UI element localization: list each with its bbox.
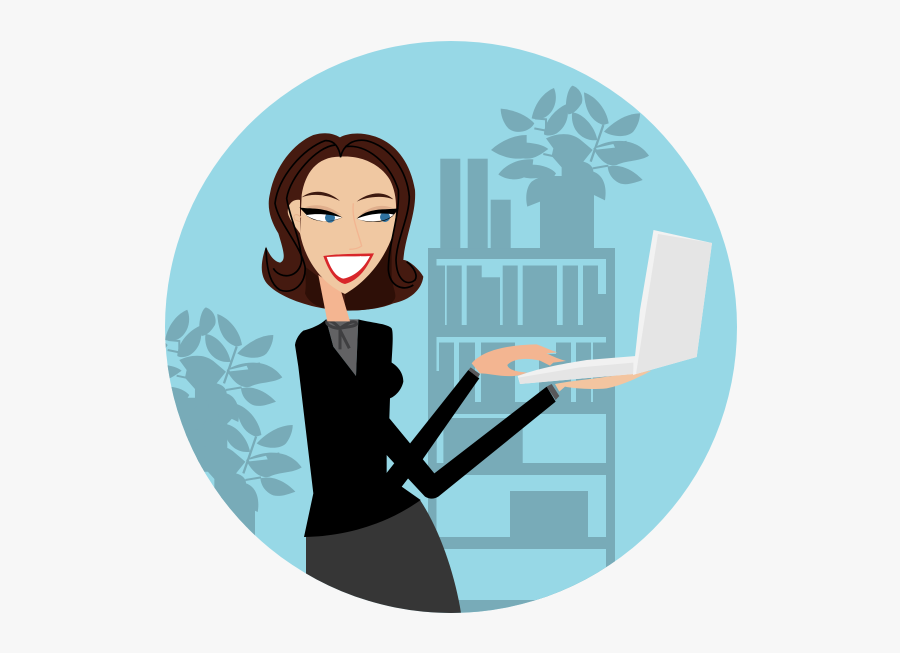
plant in vase, top right: [491, 86, 649, 250]
lower hand: [555, 371, 652, 392]
bookshelf: [428, 248, 615, 613]
jacket: [295, 319, 423, 537]
upper hand: [472, 344, 566, 376]
blouse: [326, 319, 358, 376]
cuffs: [468, 367, 559, 400]
torso and arms: [295, 319, 652, 537]
nose: [349, 203, 362, 249]
woman: [262, 133, 712, 620]
background circle: [165, 41, 737, 613]
hair strands: [266, 140, 416, 291]
hair shadow: [305, 237, 395, 311]
scene: office silhouettes: [124, 86, 649, 613]
books on top of shelf: [440, 159, 511, 249]
hair: [262, 133, 423, 310]
head: [262, 133, 423, 321]
laptop base: [518, 356, 637, 384]
front arm: [389, 387, 556, 499]
neck: [318, 275, 350, 321]
bow tie: [327, 321, 357, 349]
illustration: businesswoman with laptop: [165, 41, 737, 613]
laptop screen: [633, 230, 712, 375]
left eye: [299, 207, 343, 223]
ear: [288, 200, 300, 233]
eyelid shadow: [305, 205, 393, 215]
face: [300, 156, 396, 294]
skirt: [306, 500, 461, 620]
back arm: [385, 370, 479, 487]
plant, left side: [165, 308, 302, 536]
eyebrows: [302, 192, 393, 202]
right eye: [357, 208, 399, 222]
mouth: [323, 253, 374, 284]
light gap between arm and jacket: [387, 455, 394, 473]
